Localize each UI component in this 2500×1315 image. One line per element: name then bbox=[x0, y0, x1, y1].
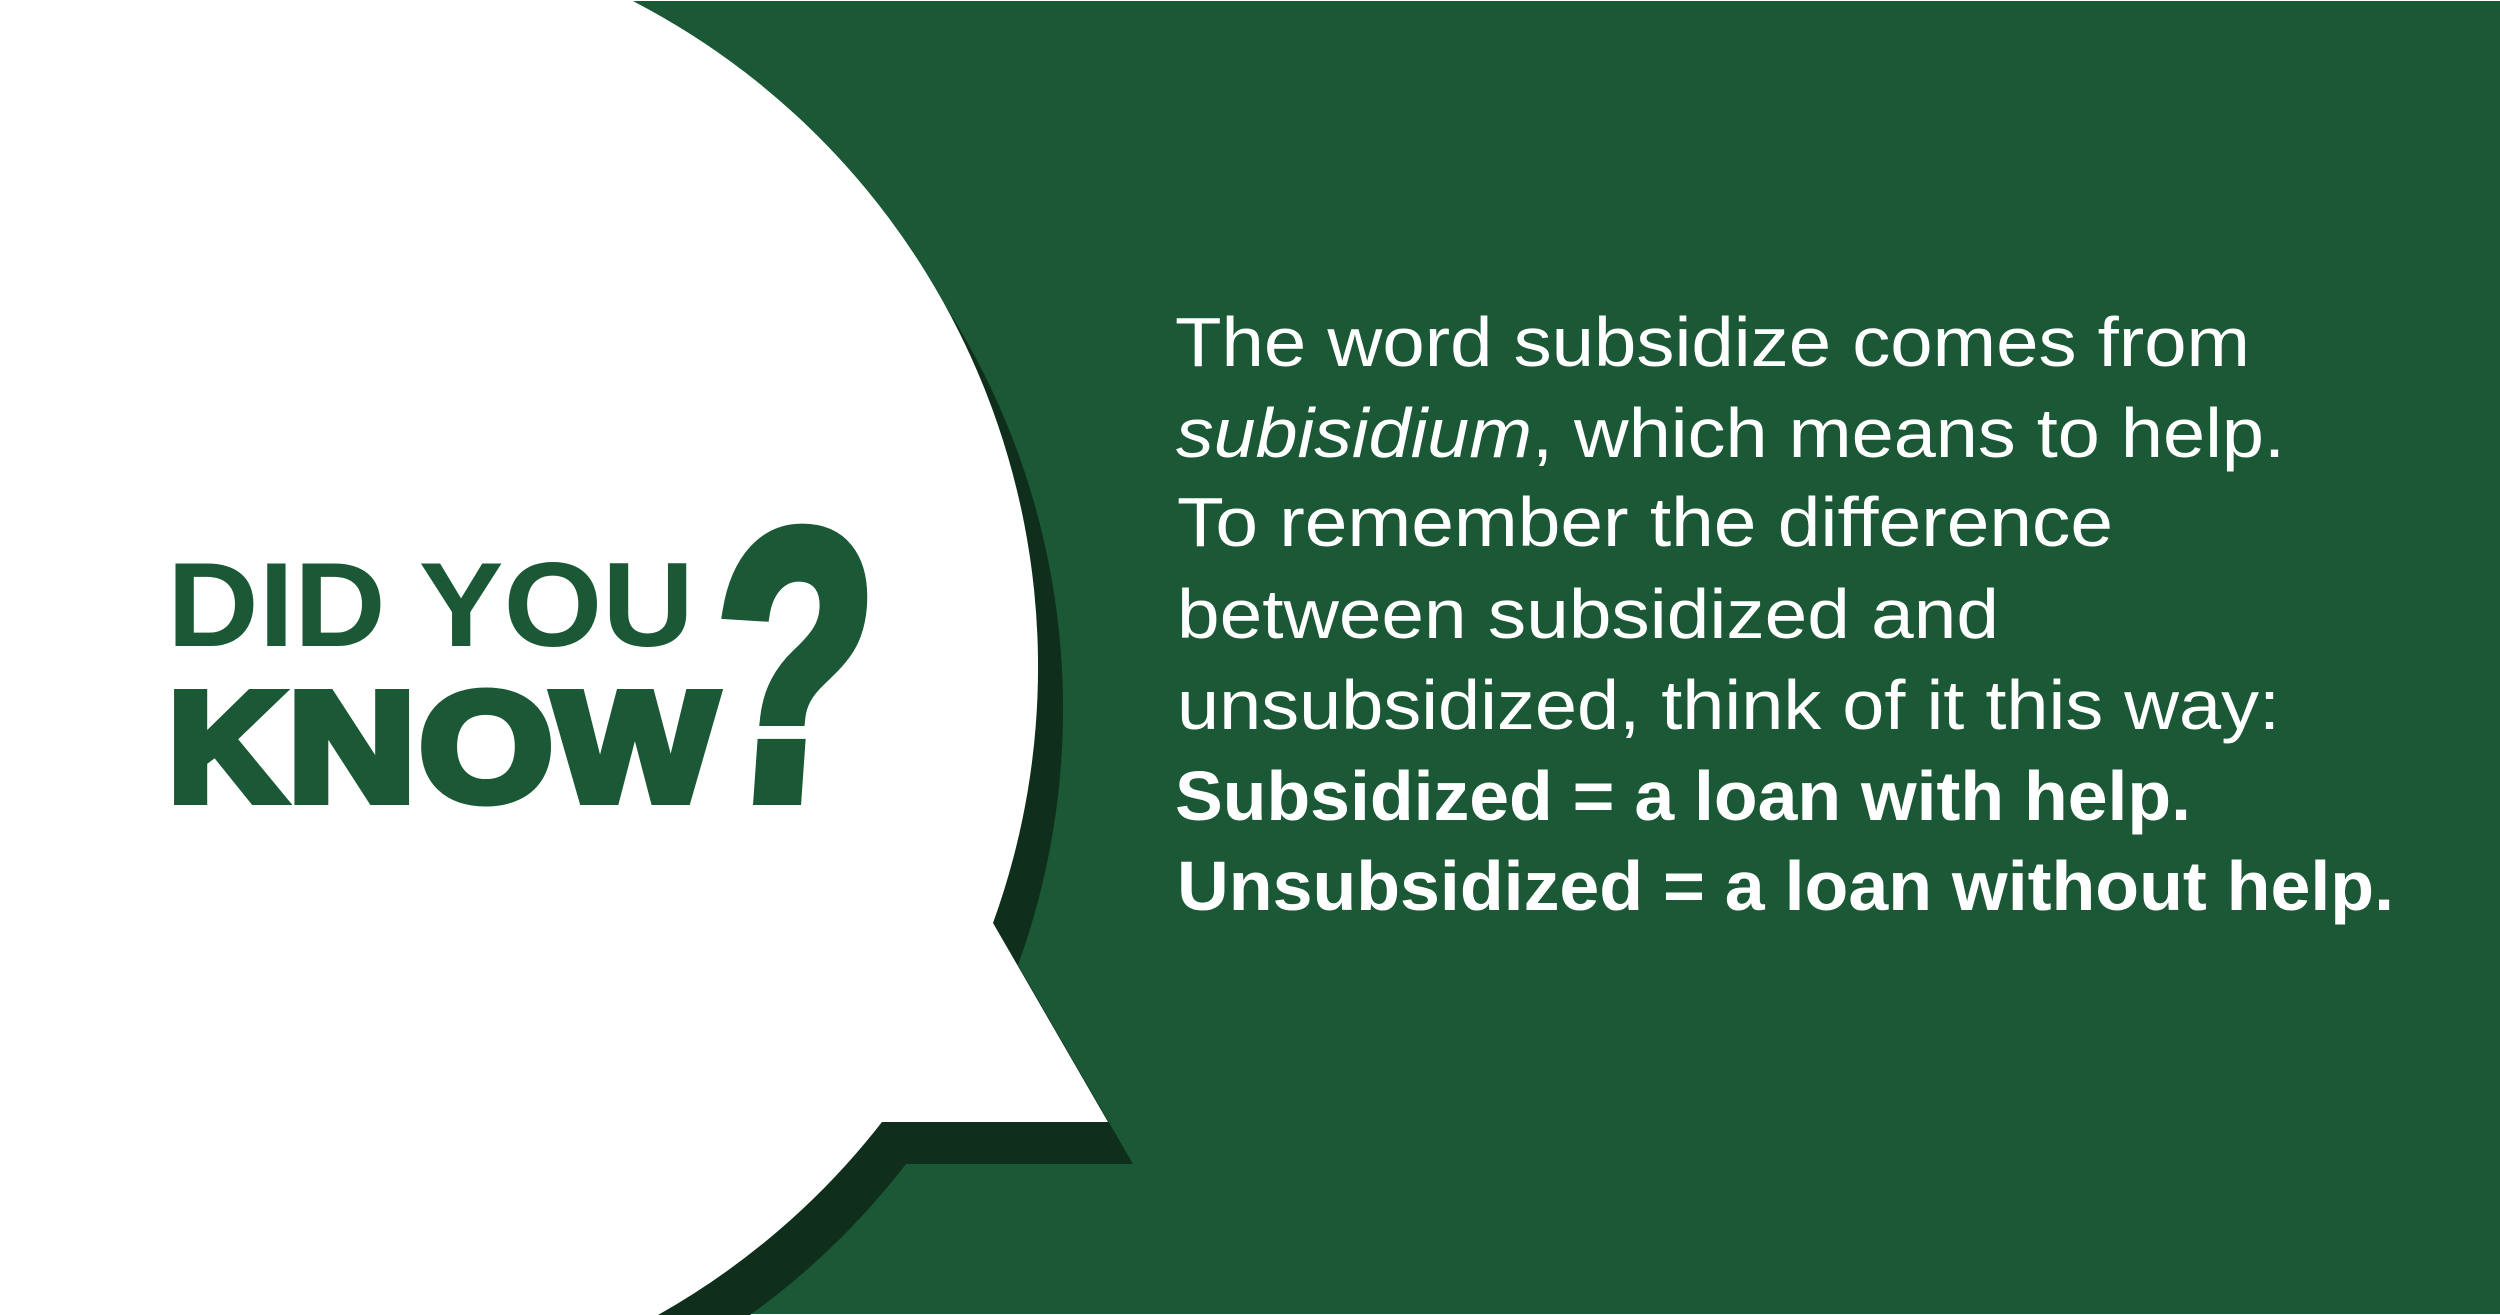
body line 2: remainder: , which means to help. bbox=[1532, 394, 2285, 472]
body text bbox=[1175, 303, 2394, 925]
bold line: subsidized: Subsidized = a loan with help. bbox=[1175, 757, 2191, 835]
heading line: know: N bbox=[288, 661, 415, 833]
body line 3: To remember the difference bbox=[1177, 483, 2113, 561]
heading: did you know bbox=[167, 454, 887, 878]
heading line: know bbox=[169, 660, 716, 833]
large question mark: ? bbox=[697, 454, 887, 878]
bold line: unsubsidized: Unsubsidized = a loan without help. bbox=[1177, 847, 2394, 925]
speech bubble bbox=[0, 0, 1108, 1315]
body line 1: The word subsidize comes from bbox=[1175, 303, 2250, 381]
body line 2: italic word: subisidium bbox=[1176, 394, 1532, 472]
heading line: know: O bbox=[420, 662, 553, 833]
heading line: know: K bbox=[169, 661, 283, 833]
speech bubble shadow bbox=[600, 42, 1133, 1315]
heading line: did you: DID YOU bbox=[167, 538, 694, 672]
body line 5: unsubsidized, think of it this way: bbox=[1177, 666, 2280, 744]
heading line: know: W bbox=[554, 660, 716, 833]
body line 4: between subsidized and bbox=[1177, 575, 1999, 653]
